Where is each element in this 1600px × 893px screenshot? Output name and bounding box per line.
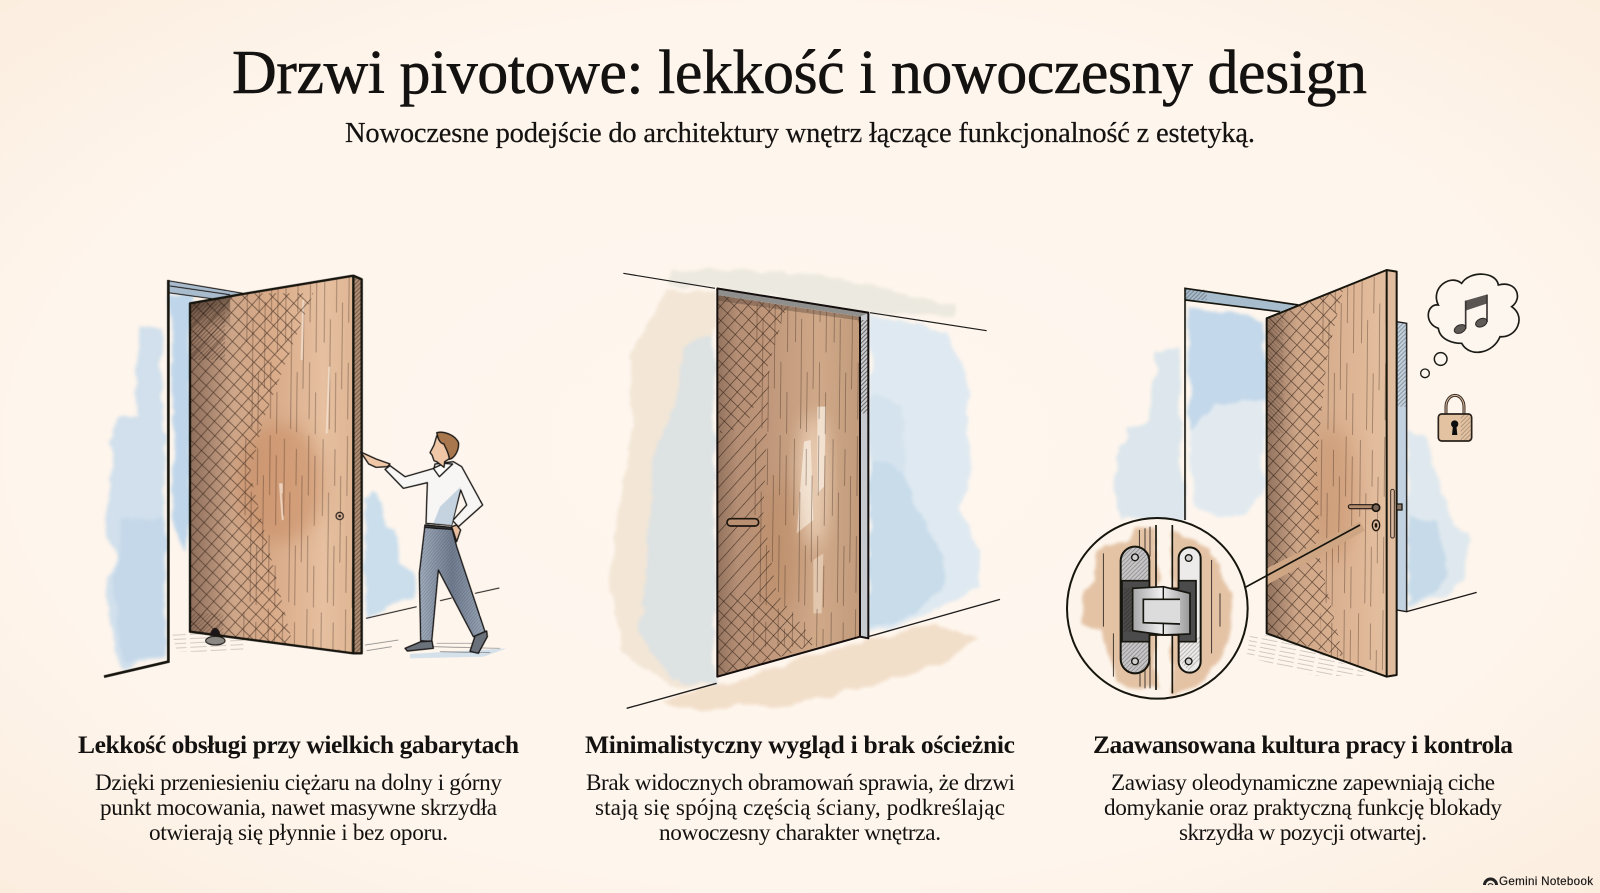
- hinge body: [1122, 581, 1196, 642]
- door stop: [210, 628, 221, 637]
- lintel: [1186, 288, 1297, 312]
- floor shadow lines: [1247, 635, 1373, 676]
- hinge plates: [1121, 547, 1149, 673]
- description: operation: domykanie oraz praktyczną funkcję blokady: [1104, 795, 1502, 821]
- watercolor wash: blue wall: [105, 295, 415, 670]
- floor shadow lines: [172, 632, 243, 652]
- watercolor wash: blue walls: [1117, 307, 1467, 610]
- door panel: [713, 290, 863, 680]
- door outline and side edge: [353, 276, 362, 653]
- heading: lightness: Lekkość obsługi przy wielkich gabarytach: [78, 730, 519, 759]
- door leaf: [1263, 267, 1390, 680]
- description: minimalism: [586, 770, 1015, 846]
- description: operation: [1104, 770, 1502, 846]
- description: operation: Zawiasy oleodynamiczne zapewniają ciche: [1111, 770, 1495, 796]
- padlock: [1438, 395, 1472, 441]
- watercolor wash: walls and floor: [610, 270, 980, 710]
- gap in hatching around connector: [1267, 522, 1365, 585]
- text block: lightness: [78, 730, 519, 846]
- lintel: [716, 288, 868, 317]
- panel: lightness of operation illustration: [104, 273, 507, 677]
- description: lightness: [95, 770, 502, 846]
- title: Drzwi pivotowe: lekkość i nowoczesny design: [232, 39, 1367, 107]
- lock escutcheon: [1372, 520, 1380, 531]
- subtitle: Nowoczesne podejście do architektury wnętrz łączące funkcjonalność z estetyką.: [345, 118, 1255, 149]
- man pointing at door: [361, 432, 507, 658]
- description: lightness: otwierają się płynnie i bez oporu.: [149, 820, 448, 846]
- door knob: [336, 512, 343, 520]
- connector line: [1243, 525, 1360, 588]
- door handle: [727, 519, 759, 526]
- door handle: [1348, 505, 1375, 509]
- description: lightness: punkt mocowania, nawet masywne skrzydła: [100, 795, 497, 821]
- wall and floor lines: [623, 273, 987, 331]
- description: minimalism: nowoczesny charakter wnętrza.: [659, 820, 941, 846]
- description: lightness: Dzięki przeniesieniu ciężaru na dolny i górny: [95, 770, 502, 796]
- frame post and floor line: [104, 280, 168, 677]
- panel: advanced operation illustration: [1067, 267, 1519, 699]
- hinge detail circle: [1067, 518, 1248, 699]
- edge latch plate: [1391, 489, 1394, 538]
- heading: minimalism: Minimalistyczny wygląd i brak ościeżnic: [585, 730, 1015, 759]
- wall floor line: [366, 588, 499, 618]
- text block: minimalism: [585, 730, 1015, 846]
- watermark: Gemini Notebook: [1499, 875, 1593, 888]
- text block: operation: [1093, 730, 1513, 846]
- thought cloud with music notes: [1421, 274, 1519, 378]
- screws: [1132, 554, 1192, 665]
- door opening lintel: [168, 281, 243, 299]
- door leaf: [187, 273, 357, 657]
- description: operation: skrzydła w pozycji otwartej.: [1179, 820, 1427, 846]
- door frame outline: [717, 288, 868, 677]
- far side strip: [1397, 322, 1407, 612]
- door reveal strip: [860, 313, 868, 638]
- description: minimalism: stają się spójną częścią ściany, podkreślając: [595, 795, 1005, 821]
- heading: operation: Zaawansowana kultura pracy i kontrola: [1093, 730, 1513, 759]
- panel: minimalist look illustration: [610, 270, 1000, 710]
- door edge: [1387, 270, 1397, 677]
- description: minimalism: Brak widocznych obramowań sprawia, że drzwi: [586, 770, 1015, 796]
